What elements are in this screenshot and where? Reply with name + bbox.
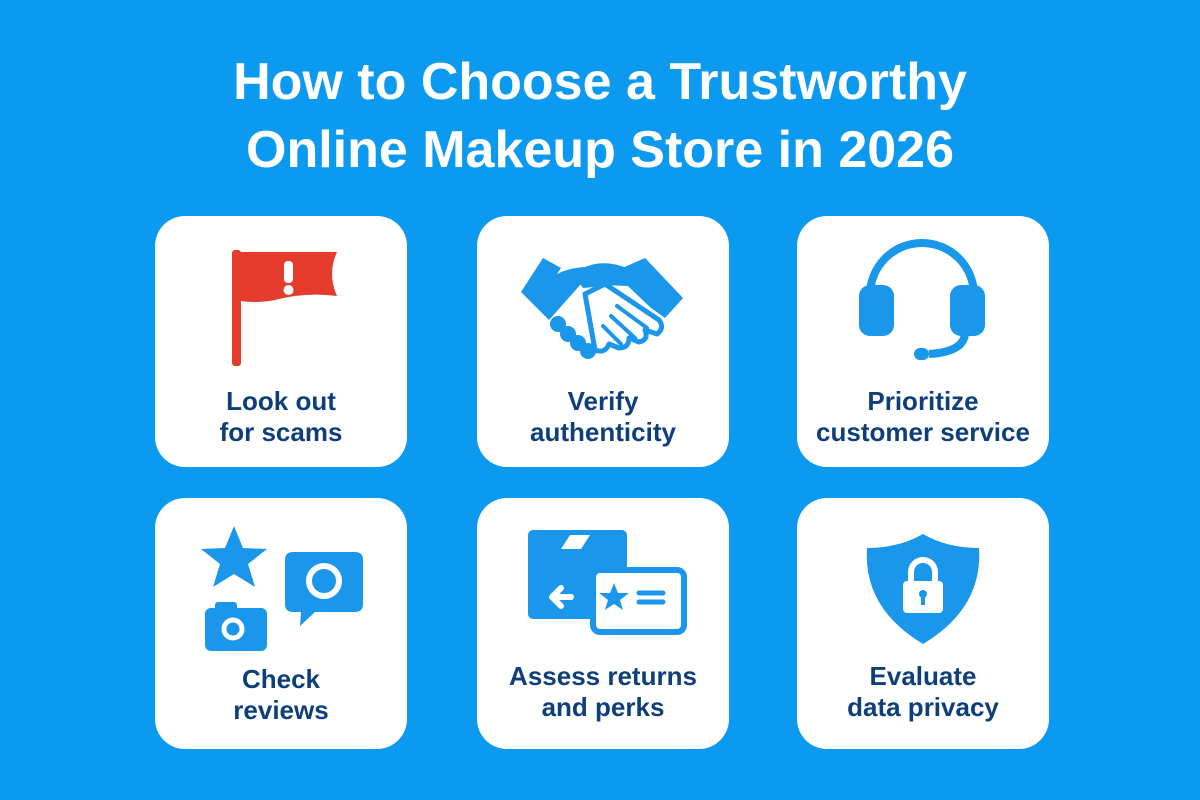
icon: headset — [859, 239, 985, 360]
title: Online Makeup Store in 2026 — [246, 121, 954, 179]
panel: check reviews — [155, 498, 407, 749]
panel: verify authenticity — [477, 216, 729, 467]
label: Verify — [568, 386, 638, 416]
label: Look out — [226, 386, 336, 416]
icon: red flag — [232, 250, 337, 366]
label: and perks — [542, 692, 664, 722]
label: Assess returns — [509, 661, 697, 691]
icon: handshake — [521, 258, 683, 359]
label — [847, 661, 999, 722]
label: data privacy — [847, 692, 999, 722]
label — [530, 386, 676, 447]
label: Evaluate — [870, 661, 976, 691]
label — [816, 386, 1030, 447]
label: reviews — [233, 695, 329, 725]
label: Prioritize — [867, 386, 979, 416]
icon: box and card — [528, 530, 687, 635]
panel: look out for scams — [155, 216, 407, 467]
label — [233, 664, 329, 725]
panel: prioritize customer service — [797, 216, 1049, 467]
label: customer service — [816, 417, 1030, 447]
label: authenticity — [530, 417, 676, 447]
label — [220, 386, 342, 447]
label: for scams — [220, 417, 342, 447]
title: How to Choose a Trustworthy — [233, 53, 967, 111]
panel: assess returns and perks — [477, 498, 729, 749]
label: Check — [242, 664, 320, 694]
icon: shield lock — [866, 534, 980, 644]
label — [509, 661, 697, 722]
title — [233, 53, 967, 179]
icon: reviews — [201, 526, 363, 651]
panel: evaluate data privacy — [797, 498, 1049, 749]
